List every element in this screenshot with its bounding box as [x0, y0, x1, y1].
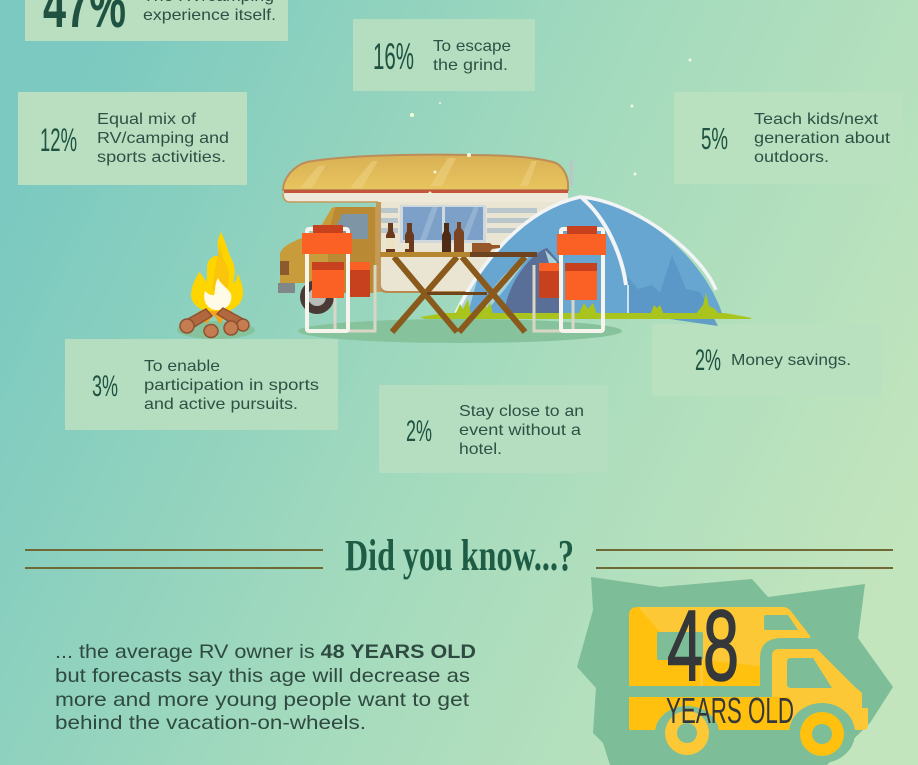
panel: 12% equal mix	[18, 92, 247, 185]
text: money savings: Money savings.	[731, 352, 851, 369]
number 48: 48	[667, 590, 739, 702]
stat: 2% money savings: 2%	[695, 344, 721, 377]
text block: average RV owner	[55, 641, 476, 734]
text: equal mix of RV/camping and sports activities: Equal mix of	[97, 111, 197, 128]
text: teach kids/next generation about outdoors: outdoors.	[754, 149, 829, 166]
icon: campfire	[177, 232, 255, 339]
cab	[772, 649, 868, 730]
text: to enable participation: participation in sports	[144, 377, 319, 394]
text: to escape the grind: the grind.	[433, 57, 508, 74]
icon: left camp chair	[302, 225, 375, 331]
panel: 5% teach kids	[674, 92, 903, 184]
text block: average RV owner: behind the vacation-on-wheels.	[55, 712, 366, 734]
stat: 3%: 3%	[92, 370, 118, 403]
stat: 12%: 12%	[40, 122, 77, 158]
panel: 2% stay close to event	[379, 385, 608, 473]
sparkles	[410, 58, 692, 194]
icon: yellow truck	[629, 607, 868, 763]
text block: average RV owner: but forecasts say this age will decrease as	[55, 665, 470, 687]
graphic: 48 years old truck on state map	[577, 577, 893, 765]
icon: right camp chair	[534, 226, 606, 331]
text: to escape the grind	[433, 38, 511, 74]
map shape	[577, 577, 893, 765]
stat: 2% stay close: 2%	[406, 415, 432, 448]
icon: tent	[420, 197, 752, 326]
text: the RV/camping experience itself	[143, 0, 276, 24]
stat: 5%: 5%	[701, 121, 728, 156]
panel: 47% the RV/camping experience itself	[25, 0, 288, 41]
ground shadow	[298, 319, 622, 343]
text: to escape the grind: To escape	[433, 38, 511, 55]
panel: 3% sports participation	[65, 339, 338, 430]
icon: RV motorhome	[278, 155, 573, 314]
text block: average RV owner: ... the average RV owner is 48 YEARS OLD	[55, 641, 476, 663]
panel: 2% money savings	[652, 324, 882, 396]
text: teach kids/next generation about outdoors	[754, 111, 891, 166]
text: teach kids/next generation about outdoors: generation about	[754, 130, 891, 147]
text: stay close to an event: event without a	[459, 422, 581, 439]
grass	[420, 313, 752, 319]
stat: 16%: 16%	[373, 36, 414, 77]
heading text: Did you know...?	[345, 531, 574, 580]
wheel arches	[655, 706, 719, 760]
cab	[280, 207, 378, 283]
text: stay close to an event: Stay close to an	[459, 403, 584, 420]
text: equal mix of RV/camping and sports activities: sports activities.	[97, 149, 226, 166]
text: stay close to an event	[459, 403, 584, 458]
text: equal mix of RV/camping and sports activities	[97, 111, 229, 166]
text: teach kids/next generation about outdoors: Teach kids/next	[754, 111, 879, 128]
text: to enable participation: and active pursuits.	[144, 396, 298, 413]
text: equal mix of RV/camping and sports activities: RV/camping and	[97, 130, 229, 147]
chassis	[629, 697, 794, 730]
icon: folding table with bottles	[380, 222, 537, 332]
wheels	[665, 711, 709, 755]
text: stay close to an event: hotel.	[459, 441, 502, 458]
illustration: RV camp scene	[278, 58, 752, 343]
panel: 16% to escape the grind	[353, 19, 535, 91]
text block: average RV owner: more and more young people want to get	[55, 689, 470, 711]
house section	[629, 607, 810, 686]
text: the RV/camping experience itself: experience itself.	[143, 7, 276, 24]
text: to enable participation: To enable	[144, 358, 220, 375]
text: to enable participation	[144, 358, 319, 413]
roof	[283, 155, 568, 190]
years old label: YEARS OLD	[666, 690, 794, 731]
